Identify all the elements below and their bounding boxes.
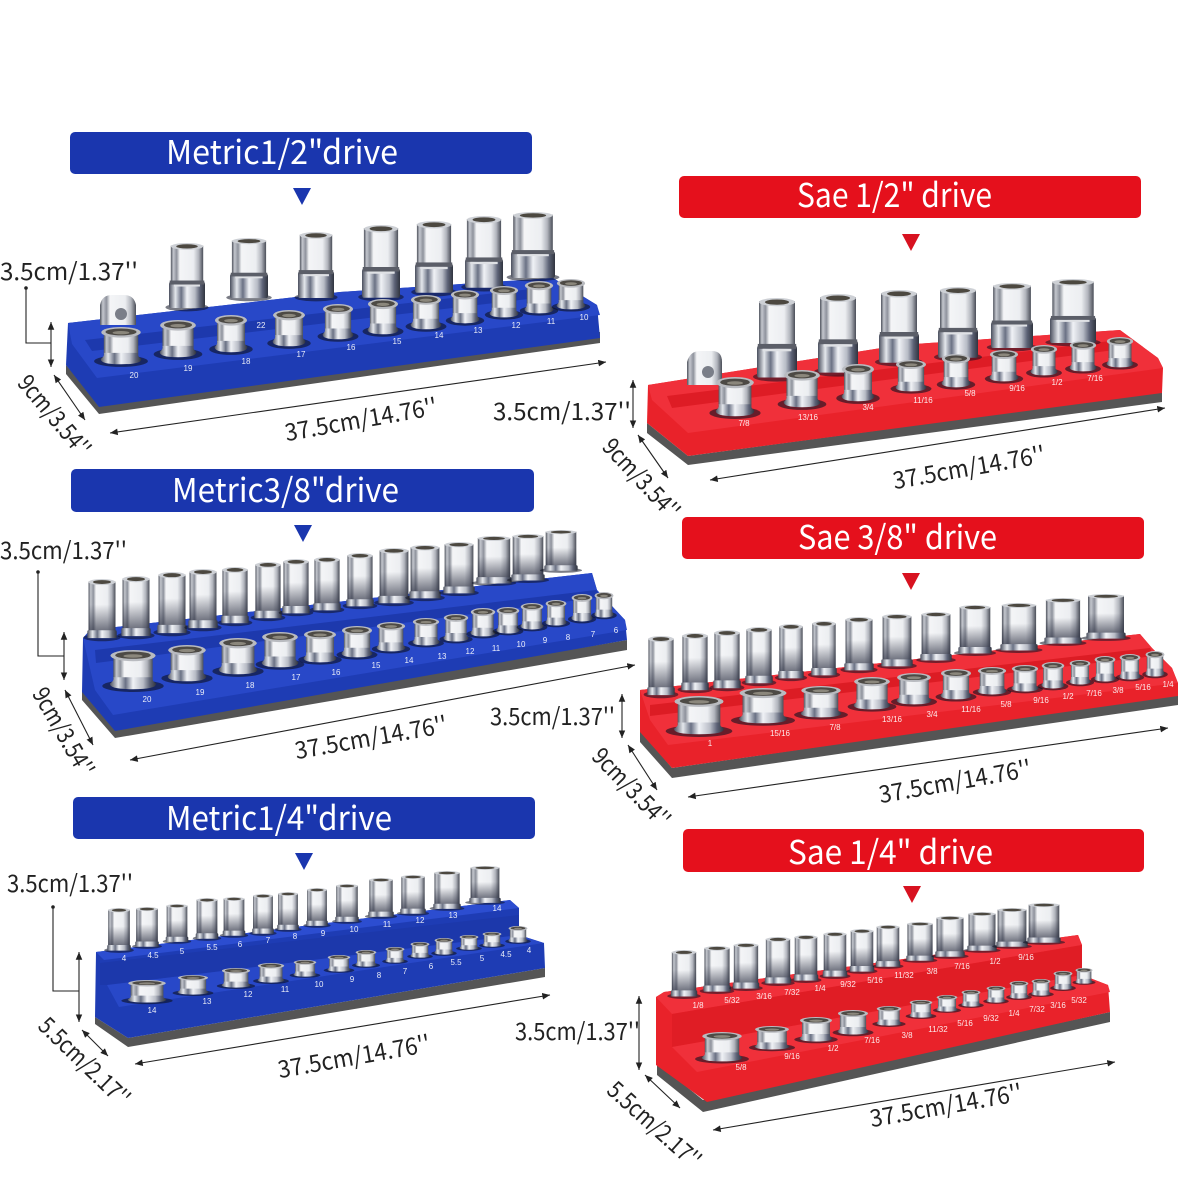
size labels: 3/4 bbox=[926, 710, 938, 719]
adapter bbox=[100, 295, 136, 325]
size labels: 5/16 bbox=[867, 976, 883, 985]
size labels: 1/2 bbox=[827, 1044, 839, 1053]
size labels: 9/16 bbox=[784, 1052, 800, 1061]
dimensions: 3.5cm/1.37'' bbox=[493, 392, 631, 427]
size labels: 14 bbox=[493, 904, 502, 913]
dimensions bbox=[490, 694, 1168, 834]
heading bar: Metric1/2"drive: Metric1/2"drive bbox=[166, 126, 398, 174]
size labels: 1/4 bbox=[1162, 680, 1174, 689]
size labels: 3/16 bbox=[756, 992, 772, 1001]
dimensions: 3.5cm/1.37'' bbox=[0, 531, 127, 566]
size labels: 12 bbox=[416, 916, 425, 925]
size labels: 19 bbox=[196, 688, 205, 697]
dimensions bbox=[493, 380, 1165, 526]
size labels: 7/16 bbox=[954, 962, 970, 971]
dimensions: 3.5cm/1.37'' bbox=[0, 252, 138, 287]
dimensions: 3.5cm/1.37'' bbox=[490, 697, 615, 732]
dimensions: 9cm/3.54'' bbox=[585, 738, 680, 834]
size labels: 1/4 bbox=[814, 984, 826, 993]
tray: red 1/4 SAE bbox=[656, 935, 1110, 1112]
size labels: 11/16 bbox=[961, 705, 981, 714]
size labels: 4 bbox=[122, 954, 127, 963]
size labels: 14 bbox=[405, 656, 414, 665]
size labels: 6 bbox=[614, 626, 619, 635]
dimensions: 3.5cm/1.37'' bbox=[515, 1012, 640, 1047]
size labels: 13 bbox=[474, 326, 483, 335]
size labels: 5.5 bbox=[206, 943, 218, 952]
size labels: 12 bbox=[244, 990, 253, 999]
size labels: 3/8 bbox=[1112, 686, 1124, 695]
size labels: 11 bbox=[281, 985, 290, 994]
size labels: 4 bbox=[527, 946, 532, 955]
size labels: 13/16 bbox=[798, 413, 819, 422]
dimensions: 37.5cm/14.76'' bbox=[275, 1024, 432, 1085]
icon: down arrow bbox=[295, 853, 313, 870]
size labels: 5/8 bbox=[964, 389, 976, 398]
size labels: 5/32 bbox=[724, 996, 740, 1005]
size labels: 9/32 bbox=[840, 980, 856, 989]
size labels: 17 bbox=[297, 350, 306, 359]
heading bar: Metric1/4"drive: Metric1/4"drive bbox=[166, 792, 392, 840]
dimensions bbox=[515, 996, 1115, 1175]
size labels: 9 bbox=[350, 975, 355, 984]
dimensions: 37.5cm/14.76'' bbox=[876, 749, 1033, 810]
size labels: 4.5 bbox=[147, 951, 159, 960]
size labels: 1/2 bbox=[989, 957, 1001, 966]
size labels: 5/8 bbox=[1000, 700, 1012, 709]
dimensions: 9cm/3.54'' bbox=[11, 366, 101, 463]
size labels: 6 bbox=[238, 940, 243, 949]
size labels: 20 bbox=[143, 695, 152, 704]
size labels: 1/2 bbox=[1051, 378, 1063, 387]
size labels: 20 bbox=[130, 371, 139, 380]
size labels: 7/8 bbox=[829, 723, 841, 732]
sockets bbox=[667, 903, 1096, 1064]
dimensions: 5.5cm/2.17'' bbox=[32, 1007, 140, 1113]
size labels: 10 bbox=[517, 640, 526, 649]
size labels: 5/32 bbox=[1071, 996, 1087, 1005]
size labels: 17 bbox=[292, 673, 301, 682]
size labels: 16 bbox=[347, 343, 356, 352]
dimensions: 3.5cm/1.37'' bbox=[7, 864, 133, 899]
size labels: 1/2 bbox=[1062, 692, 1074, 701]
dimensions: 37.5cm/14.76'' bbox=[890, 435, 1047, 496]
dimensions: 37.5cm/14.76'' bbox=[282, 387, 439, 448]
size labels: 3/16 bbox=[1050, 1001, 1066, 1010]
sockets bbox=[94, 212, 590, 367]
sockets bbox=[687, 279, 1138, 419]
size labels bbox=[708, 680, 1174, 748]
size labels: 13 bbox=[203, 997, 212, 1006]
dimensions: 9cm/3.54'' bbox=[596, 429, 690, 526]
size labels: 8 bbox=[377, 971, 382, 980]
panel: Metric 1/4 inch drive bbox=[7, 792, 550, 1113]
sockets bbox=[644, 594, 1168, 737]
size labels: 12 bbox=[512, 321, 521, 330]
dimensions: 37.5cm/14.76'' bbox=[867, 1073, 1024, 1134]
size labels: 19 bbox=[184, 364, 193, 373]
size labels bbox=[130, 313, 589, 380]
size labels: 11 bbox=[492, 644, 501, 653]
size labels: 11/32 bbox=[894, 971, 914, 980]
size labels: 12 bbox=[466, 647, 475, 656]
size labels: 3/4 bbox=[862, 403, 874, 412]
size labels: 15/16 bbox=[770, 729, 791, 738]
icon: down arrow bbox=[293, 188, 311, 205]
tray: blue 1/2 metric bbox=[66, 278, 600, 414]
tray: blue 3/8 metric bbox=[82, 573, 627, 738]
size labels: 3/8 bbox=[901, 1031, 913, 1040]
dimensions bbox=[7, 864, 550, 1113]
size labels: 9/16 bbox=[1033, 696, 1049, 705]
size labels: 7/16 bbox=[1087, 374, 1103, 383]
size labels bbox=[738, 374, 1103, 428]
tray: blue 1/4 metric bbox=[95, 900, 545, 1047]
size labels: 7/32 bbox=[784, 988, 800, 997]
size labels: 7/16 bbox=[1086, 689, 1102, 698]
dimensions bbox=[0, 531, 635, 782]
sockets bbox=[83, 530, 617, 692]
size labels: 9/16 bbox=[1009, 384, 1025, 393]
size labels: 7/16 bbox=[864, 1036, 880, 1045]
size labels: 15 bbox=[372, 661, 381, 670]
size labels: 18 bbox=[246, 681, 255, 690]
tray: red 1/2 SAE bbox=[647, 330, 1163, 465]
sockets bbox=[104, 866, 531, 1004]
size labels: 11 bbox=[383, 920, 392, 929]
size labels: 16 bbox=[332, 668, 341, 677]
icon: down arrow bbox=[903, 886, 921, 903]
heading bar: Sae 1/4" drive: Sae 1/4" drive bbox=[788, 826, 993, 874]
dimensions bbox=[0, 252, 606, 463]
panel: Metric 3/8 inch drive bbox=[0, 464, 635, 782]
size labels: 15 bbox=[393, 337, 402, 346]
size labels: 6 bbox=[429, 962, 434, 971]
icon: down arrow bbox=[902, 573, 920, 590]
size labels: 13/16 bbox=[882, 715, 903, 724]
size labels: 10 bbox=[315, 980, 324, 989]
size labels: 1 bbox=[708, 739, 713, 748]
panel: SAE 1/4 inch drive bbox=[515, 826, 1144, 1175]
panel: SAE 3/8 inch drive bbox=[490, 511, 1178, 834]
size labels: 5/16 bbox=[1135, 683, 1151, 692]
size labels: 22 bbox=[257, 321, 266, 330]
heading bar: Sae 3/8" drive bbox=[682, 511, 1144, 559]
size labels: 10 bbox=[350, 925, 359, 934]
size labels: 10 bbox=[580, 313, 589, 322]
size labels bbox=[692, 953, 1087, 1072]
size labels: 5 bbox=[480, 954, 485, 963]
heading bar: Metric1/4"drive bbox=[73, 792, 535, 840]
size labels: 18 bbox=[242, 357, 251, 366]
size labels: 7 bbox=[591, 630, 596, 639]
size labels bbox=[122, 904, 532, 1015]
dimensions: 9cm/3.54'' bbox=[26, 680, 105, 782]
size labels: 8 bbox=[566, 633, 571, 642]
size labels: 9 bbox=[321, 929, 326, 938]
icon: down arrow bbox=[294, 525, 312, 542]
size labels: 7 bbox=[403, 967, 408, 976]
panel: Metric 1/2 inch drive bbox=[0, 126, 606, 463]
heading bar: Sae 1/4" drive bbox=[683, 826, 1144, 874]
heading bar: Sae 3/8" drive: Sae 3/8" drive bbox=[798, 511, 997, 559]
size labels: 5/8 bbox=[735, 1063, 747, 1072]
size labels: 7 bbox=[266, 936, 271, 945]
icon: down arrow bbox=[902, 234, 920, 251]
dimensions: 5.5cm/2.17'' bbox=[601, 1071, 710, 1175]
size labels: 5 bbox=[180, 947, 185, 956]
size labels: 11/32 bbox=[928, 1025, 948, 1034]
heading bar: Metric3/8"drive: Metric3/8"drive bbox=[172, 464, 399, 512]
size labels: 11 bbox=[547, 317, 556, 326]
size labels: 3/8 bbox=[926, 967, 938, 976]
size labels: 5.5 bbox=[450, 958, 462, 967]
size labels: 4.5 bbox=[500, 950, 512, 959]
size labels: 9/16 bbox=[1018, 953, 1034, 962]
tray: red 3/8 SAE bbox=[640, 634, 1178, 778]
size labels bbox=[143, 626, 619, 704]
size labels: 7/32 bbox=[1029, 1005, 1045, 1014]
size labels: 9 bbox=[543, 636, 548, 645]
size labels: 11/16 bbox=[913, 396, 933, 405]
heading bar: Metric3/8"drive bbox=[71, 464, 534, 512]
size labels: 5/16 bbox=[957, 1019, 973, 1028]
heading bar: Sae 1/2" drive bbox=[679, 169, 1141, 218]
size labels: 9/32 bbox=[983, 1014, 999, 1023]
panel: SAE 1/2 inch drive bbox=[493, 169, 1165, 526]
size labels: 8 bbox=[293, 932, 298, 941]
size labels: 1/4 bbox=[1008, 1009, 1020, 1018]
dimensions: 37.5cm/14.76'' bbox=[292, 705, 449, 766]
size labels: 14 bbox=[148, 1006, 157, 1015]
size labels: 1/8 bbox=[692, 1001, 704, 1010]
size labels: 13 bbox=[438, 652, 447, 661]
adapter bbox=[687, 351, 722, 385]
heading bar: Sae 1/2" drive: Sae 1/2" drive bbox=[797, 169, 992, 217]
size labels: 13 bbox=[449, 911, 458, 920]
size labels: 14 bbox=[435, 331, 444, 340]
heading bar: Metric1/2"drive bbox=[70, 126, 532, 174]
size labels: 7/8 bbox=[738, 419, 750, 428]
